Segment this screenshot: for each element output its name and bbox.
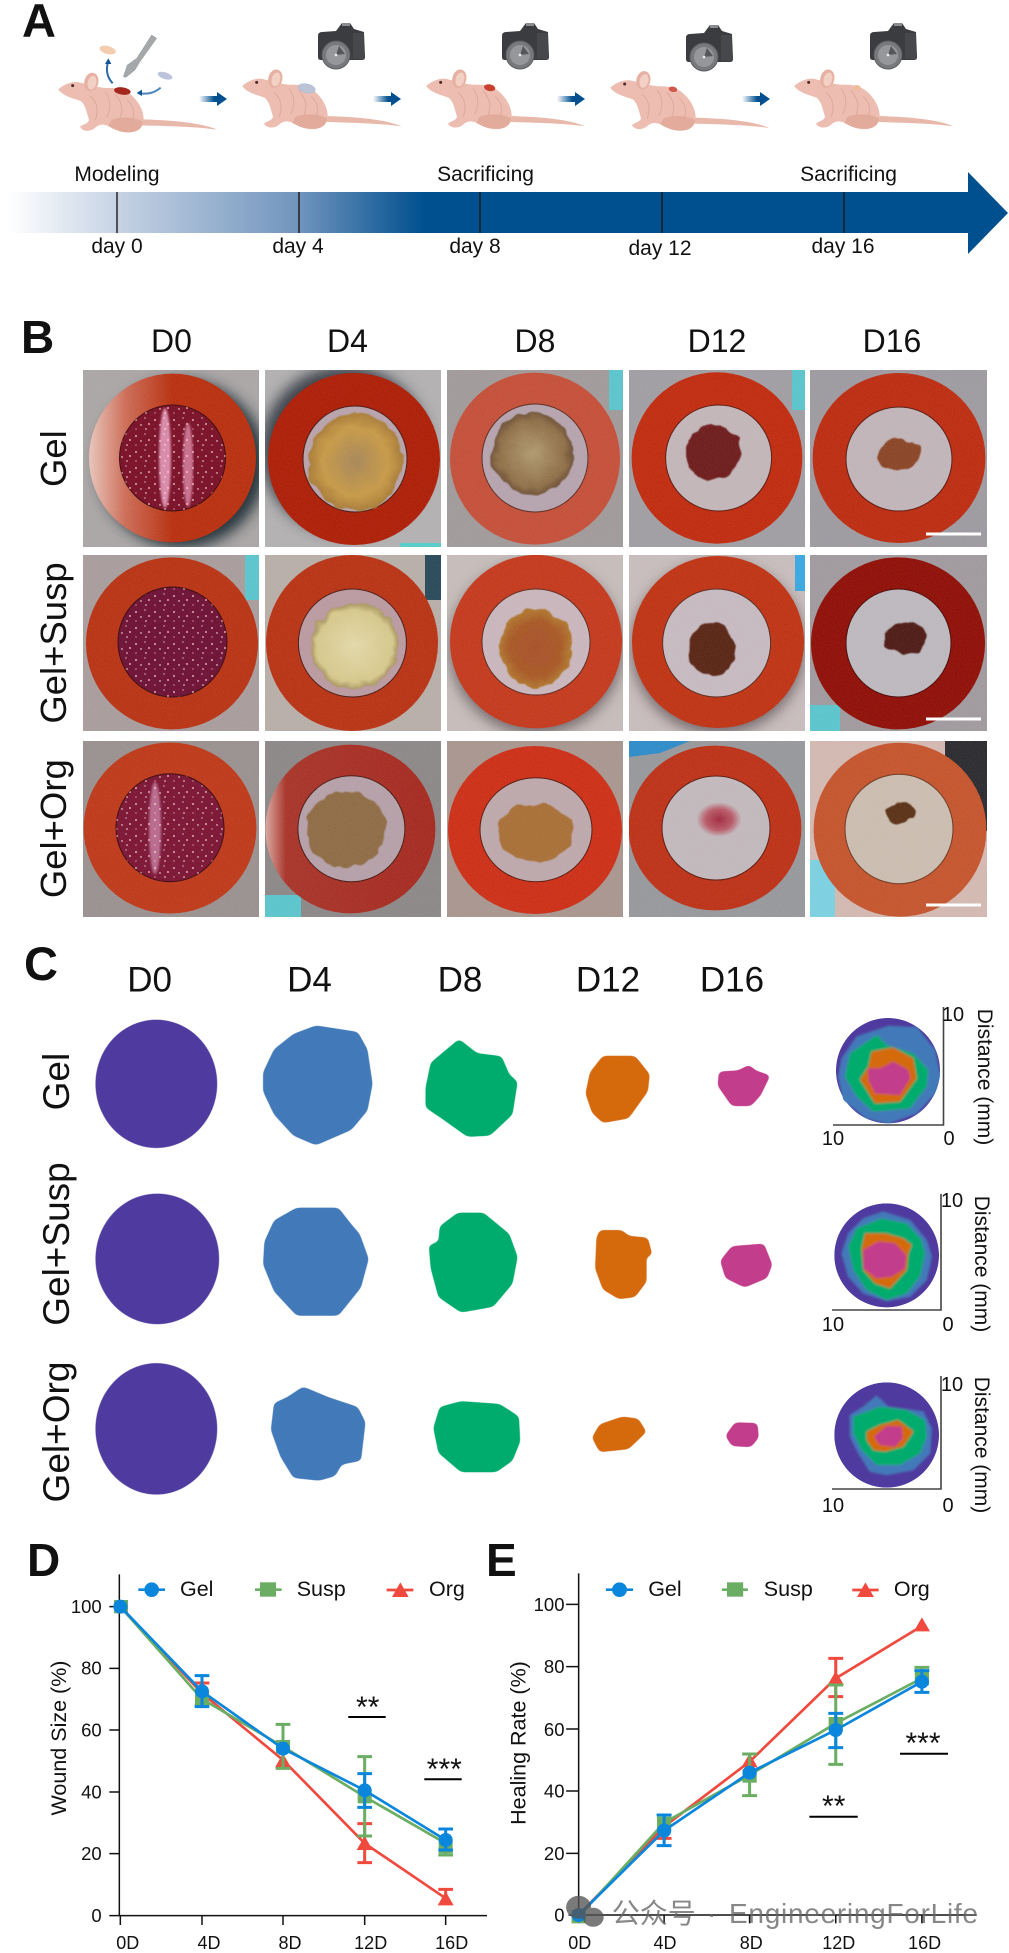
significance 12D: **	[356, 1691, 380, 1724]
panel B: wound photographs	[21, 311, 987, 917]
y axis tick labels: 40	[544, 1780, 564, 1802]
photo Gel D8	[447, 370, 623, 547]
mouse day 8	[426, 68, 585, 129]
watermark text: 公众号	[612, 1898, 696, 1929]
contour overlay Gel+Susp	[822, 1190, 993, 1336]
legend	[138, 1577, 465, 1601]
x axis tick labels: 8D	[740, 1933, 763, 1953]
y axis tick labels	[71, 1596, 102, 1926]
y axis tick labels: 20	[81, 1843, 102, 1864]
group row labels	[33, 430, 74, 898]
y axis tick labels: 60	[544, 1719, 564, 1740]
legend: Susp	[764, 1577, 813, 1601]
y axis title: Wound Size (%)	[47, 1661, 71, 1815]
timeline day labels: day 8	[449, 235, 501, 258]
camera icon 2	[502, 23, 549, 69]
contour overlay Gel	[822, 1004, 996, 1150]
y axis tick labels: 80	[544, 1656, 564, 1677]
contour overlay Gel: Distance (mm)	[973, 1009, 996, 1145]
timeline event labels: Modeling	[74, 163, 160, 186]
y axis tick labels: 0	[91, 1905, 102, 1926]
photo Gel+Org D12	[629, 741, 805, 917]
wound traces Gel	[95, 1020, 770, 1148]
x axis tick labels: 4D	[653, 1933, 677, 1953]
arrow 1	[199, 92, 227, 106]
wound traces Gel+Org	[95, 1363, 759, 1495]
group row labels: Gel+Org	[33, 759, 74, 898]
day column headers	[151, 323, 921, 359]
group row labels: Gel	[33, 430, 74, 487]
contour overlay Gel+Susp: 0	[942, 1314, 954, 1336]
x axis tick labels: 16D	[435, 1933, 468, 1953]
watermark text: EngineeringForLife	[729, 1898, 978, 1929]
series Susp	[572, 1667, 929, 1923]
significance 16D: ***	[905, 1727, 941, 1760]
timeline arrow	[0, 172, 1008, 254]
contour overlay Gel+Susp: 10	[822, 1314, 844, 1336]
photo Gel D16	[810, 370, 987, 547]
watermark text: ·	[707, 1898, 716, 1929]
day column headers: D16	[863, 323, 921, 359]
x axis tick labels	[568, 1933, 941, 1953]
legend: Org	[894, 1577, 930, 1601]
group row labels: Gel	[36, 1053, 77, 1110]
series Org	[120, 1607, 454, 1905]
significance 12D	[809, 1790, 858, 1823]
wound traces Gel+Susp	[95, 1193, 772, 1324]
legend	[606, 1577, 930, 1601]
y axis title: Healing Rate (%)	[506, 1661, 530, 1825]
mouse day 4 with dressing	[242, 68, 401, 129]
series Org	[579, 1617, 930, 1915]
x axis tick labels	[116, 1933, 468, 1953]
contour overlay Gel: 10	[942, 1004, 964, 1026]
panel C: wound area traces	[24, 937, 996, 1517]
day column headers: D16	[700, 960, 764, 1000]
arrow 2	[373, 92, 401, 106]
y axis tick labels: 100	[534, 1594, 564, 1615]
y axis tick labels: 80	[81, 1658, 102, 1678]
contour overlay Gel: 10	[822, 1128, 844, 1150]
x axis tick labels: 16D	[908, 1933, 941, 1953]
x axis tick labels: 8D	[278, 1933, 302, 1953]
day column headers: D0	[151, 323, 192, 359]
timeline day labels	[91, 235, 875, 260]
panel E: healing rate line chart	[486, 1534, 977, 1953]
timeline day labels: day 4	[272, 235, 324, 258]
day column headers: D12	[576, 960, 640, 1000]
panel letter C: C	[24, 937, 58, 990]
timeline day labels: day 16	[811, 235, 875, 258]
day column headers: D12	[688, 323, 746, 359]
day column headers	[127, 960, 764, 1000]
photo Gel D4	[265, 370, 441, 547]
x axis tick labels: 4D	[197, 1933, 221, 1953]
photo Gel+Org D8	[447, 741, 623, 917]
series Gel	[572, 1671, 929, 1922]
day column headers: D4	[327, 323, 368, 359]
photo Gel+Susp D16	[810, 555, 987, 731]
panel letter E: E	[486, 1534, 517, 1586]
y axis tick labels: 60	[81, 1720, 102, 1740]
legend: Gel	[180, 1577, 213, 1601]
significance 16D: ***	[427, 1753, 462, 1786]
group row labels: Gel+Susp	[36, 1162, 77, 1326]
photo Gel+Org D0	[83, 741, 259, 917]
photo Gel D12	[629, 370, 805, 547]
y axis tick labels	[534, 1594, 564, 1926]
day column headers: D4	[287, 960, 332, 1000]
camera icon 3	[686, 25, 733, 71]
series Gel	[113, 1600, 453, 1850]
mouse day 16	[794, 68, 953, 129]
axes	[566, 1573, 977, 1923]
day column headers: D8	[515, 323, 555, 359]
timeline event labels	[74, 163, 897, 186]
panel D: wound size line chart	[27, 1534, 487, 1953]
contour overlay Gel: 0	[943, 1128, 955, 1150]
timeline day labels: day 12	[628, 237, 692, 260]
significance 12D: **	[822, 1790, 846, 1823]
y axis tick labels: 40	[81, 1782, 102, 1802]
panel letter B: B	[21, 311, 54, 363]
day column headers: D0	[127, 960, 172, 1000]
x axis tick labels: 12D	[822, 1933, 855, 1953]
panel A: experimental timeline	[0, 0, 1008, 260]
contour overlay Gel+Org: 10	[941, 1374, 963, 1396]
arrow 4	[742, 92, 770, 106]
y axis tick labels: 0	[554, 1904, 564, 1926]
significance 12D	[348, 1691, 386, 1724]
camera icon 4	[870, 23, 917, 69]
mouse day 0 with wound and surgery tools	[58, 35, 217, 132]
contour overlay Gel+Susp: Distance (mm)	[970, 1196, 993, 1332]
arrow 3	[557, 92, 585, 106]
contour overlay Gel+Org	[822, 1374, 993, 1517]
timeline event labels: Sacrificing	[800, 163, 897, 186]
day column headers: D8	[438, 960, 482, 1000]
y axis tick labels: 20	[544, 1843, 564, 1864]
photo Gel+Susp D12	[629, 555, 805, 731]
legend: Gel	[648, 1577, 682, 1601]
contour overlay Gel+Org: 10	[822, 1495, 844, 1517]
x axis tick labels: 0D	[116, 1933, 139, 1953]
series Susp	[114, 1600, 453, 1855]
watermark text	[612, 1898, 978, 1929]
y axis tick labels: 100	[71, 1596, 102, 1617]
photo Gel+Org D16	[810, 741, 987, 917]
group row labels: Gel+Susp	[33, 562, 74, 724]
timeline event labels: Sacrificing	[437, 163, 534, 186]
mouse day 12	[610, 70, 769, 131]
contour overlay Gel+Susp: 10	[941, 1190, 963, 1212]
x axis tick labels: 12D	[354, 1933, 387, 1953]
group row labels	[36, 1053, 77, 1502]
group row labels: Gel+Org	[36, 1362, 77, 1502]
x axis tick labels: 0D	[568, 1933, 591, 1953]
photo Gel+Susp D8	[447, 555, 623, 731]
legend: Susp	[297, 1577, 346, 1601]
photo Gel D0	[83, 370, 259, 547]
contour overlay Gel+Org: Distance (mm)	[970, 1377, 993, 1513]
watermark	[566, 1896, 978, 1929]
axes	[109, 1574, 487, 1925]
panel letter D: D	[27, 1534, 60, 1586]
photo Gel+Susp D0	[83, 555, 259, 731]
timeline day labels: day 0	[91, 235, 143, 258]
photo Gel+Susp D4	[265, 555, 441, 731]
camera icon 1	[318, 23, 365, 69]
icon: chat bubbles	[566, 1896, 604, 1927]
photo Gel+Org D4	[265, 741, 441, 917]
legend: Org	[429, 1577, 465, 1601]
contour overlay Gel+Org: 0	[942, 1495, 954, 1517]
